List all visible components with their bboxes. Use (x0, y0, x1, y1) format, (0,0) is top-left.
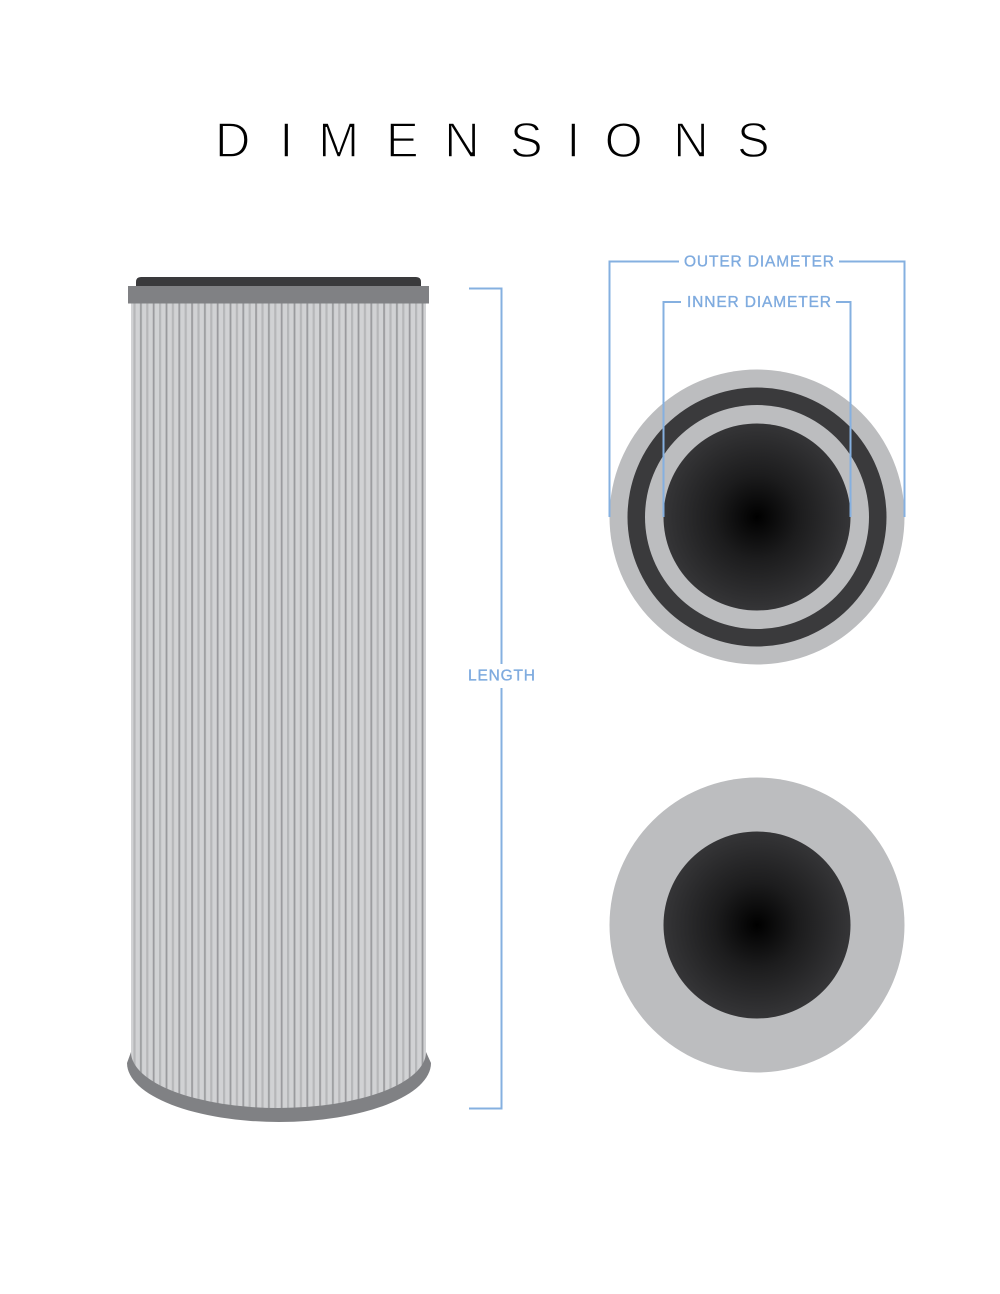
outer diameter label: OUTER DIAMETER (684, 254, 834, 271)
top collar (128, 286, 429, 304)
inner diameter label: INNER DIAMETER (687, 294, 831, 311)
title: DIMENSIONS (215, 114, 770, 168)
outer diameter bracket (610, 254, 904, 517)
filter cartridge side view (127, 277, 431, 1122)
length bracket (468, 288, 535, 1108)
bottom view: solid end (610, 778, 904, 1072)
top cap (136, 277, 421, 287)
bottom rim (127, 1052, 431, 1122)
top view: ringed end (610, 370, 904, 664)
length label: LENGTH (468, 668, 535, 685)
inner diameter bracket (664, 294, 850, 517)
pleated body (131, 300, 426, 1108)
